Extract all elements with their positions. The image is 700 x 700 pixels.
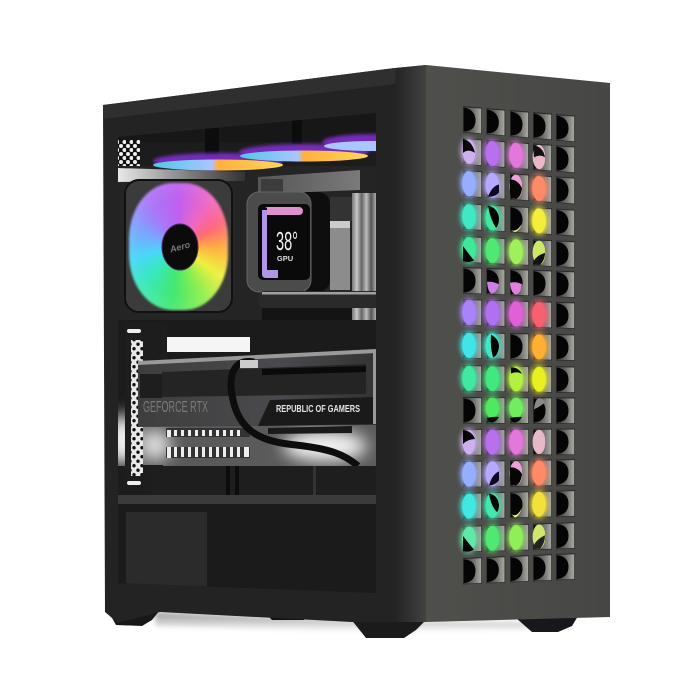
rear fan frame [125, 180, 232, 312]
GPU underside connector [268, 426, 352, 434]
row 9 holes [462, 365, 575, 393]
top fan left [153, 160, 283, 170]
top radiator rail [205, 120, 302, 154]
row 15 holes [463, 553, 575, 584]
coolant tube bar [260, 291, 376, 308]
PCI bracket [125, 329, 167, 485]
pump base [262, 308, 352, 320]
GPU power cable [231, 361, 358, 466]
cable connector [240, 360, 258, 368]
rear bright spill [108, 414, 136, 466]
row 2 holes [463, 138, 575, 173]
lower bright spill [283, 431, 367, 461]
graphics card [138, 349, 376, 427]
row 8 holes [462, 332, 575, 361]
motherboard tray [118, 168, 245, 182]
LCD temperature: 38° [276, 226, 298, 256]
GPU shroud recess [162, 364, 366, 397]
LCD label: GPU [277, 254, 293, 263]
top fan glow [153, 134, 422, 169]
top edge band [103, 65, 426, 119]
GEFORCE RTX label: GEFORCE RTX [143, 399, 208, 416]
row 4 holes [462, 203, 575, 236]
I/O grille box [258, 170, 360, 194]
front pillar [395, 65, 426, 622]
vent hole grid [462, 106, 575, 584]
PSU shroud [118, 504, 376, 596]
PSU shroud lip [118, 495, 376, 504]
ROG panel [258, 397, 376, 426]
row 6 holes [463, 267, 575, 298]
row 13 holes [462, 490, 575, 520]
white bracket strip [166, 337, 250, 352]
RGB rear fan [127, 181, 230, 312]
GPU left vents [140, 374, 162, 398]
row 14 holes [462, 522, 575, 553]
fan logo: Aero [168, 239, 192, 255]
top fan right [324, 141, 376, 151]
top fan middle [240, 150, 368, 162]
row 5 holes [462, 236, 575, 268]
bottom fans [226, 466, 358, 495]
GPU edge lights [373, 352, 376, 424]
LCD screen [258, 204, 310, 280]
row 11 holes [463, 429, 575, 456]
front frame [103, 68, 402, 623]
GPU bay background [108, 320, 376, 466]
row 12 holes [462, 459, 575, 488]
rear mesh vent [118, 140, 140, 166]
REPUBLIC OF GAMERS label: REPUBLIC OF GAMERS [276, 404, 360, 415]
PCI slot covers [166, 428, 250, 458]
side panel [426, 65, 610, 622]
fan hub [162, 224, 198, 270]
row 3 holes [462, 170, 575, 204]
case feet [105, 605, 578, 638]
VRM heatsink [352, 193, 376, 333]
row 1 holes [463, 106, 575, 142]
floor shadow [155, 612, 560, 632]
row 7 holes [462, 299, 575, 329]
AIO pump block [247, 192, 330, 292]
slot bright spill [139, 429, 171, 461]
memory modules [330, 197, 352, 290]
glass window interior [118, 113, 376, 593]
PSU window [126, 512, 207, 586]
LCD gauge [265, 207, 303, 215]
row 10 holes [463, 397, 575, 424]
